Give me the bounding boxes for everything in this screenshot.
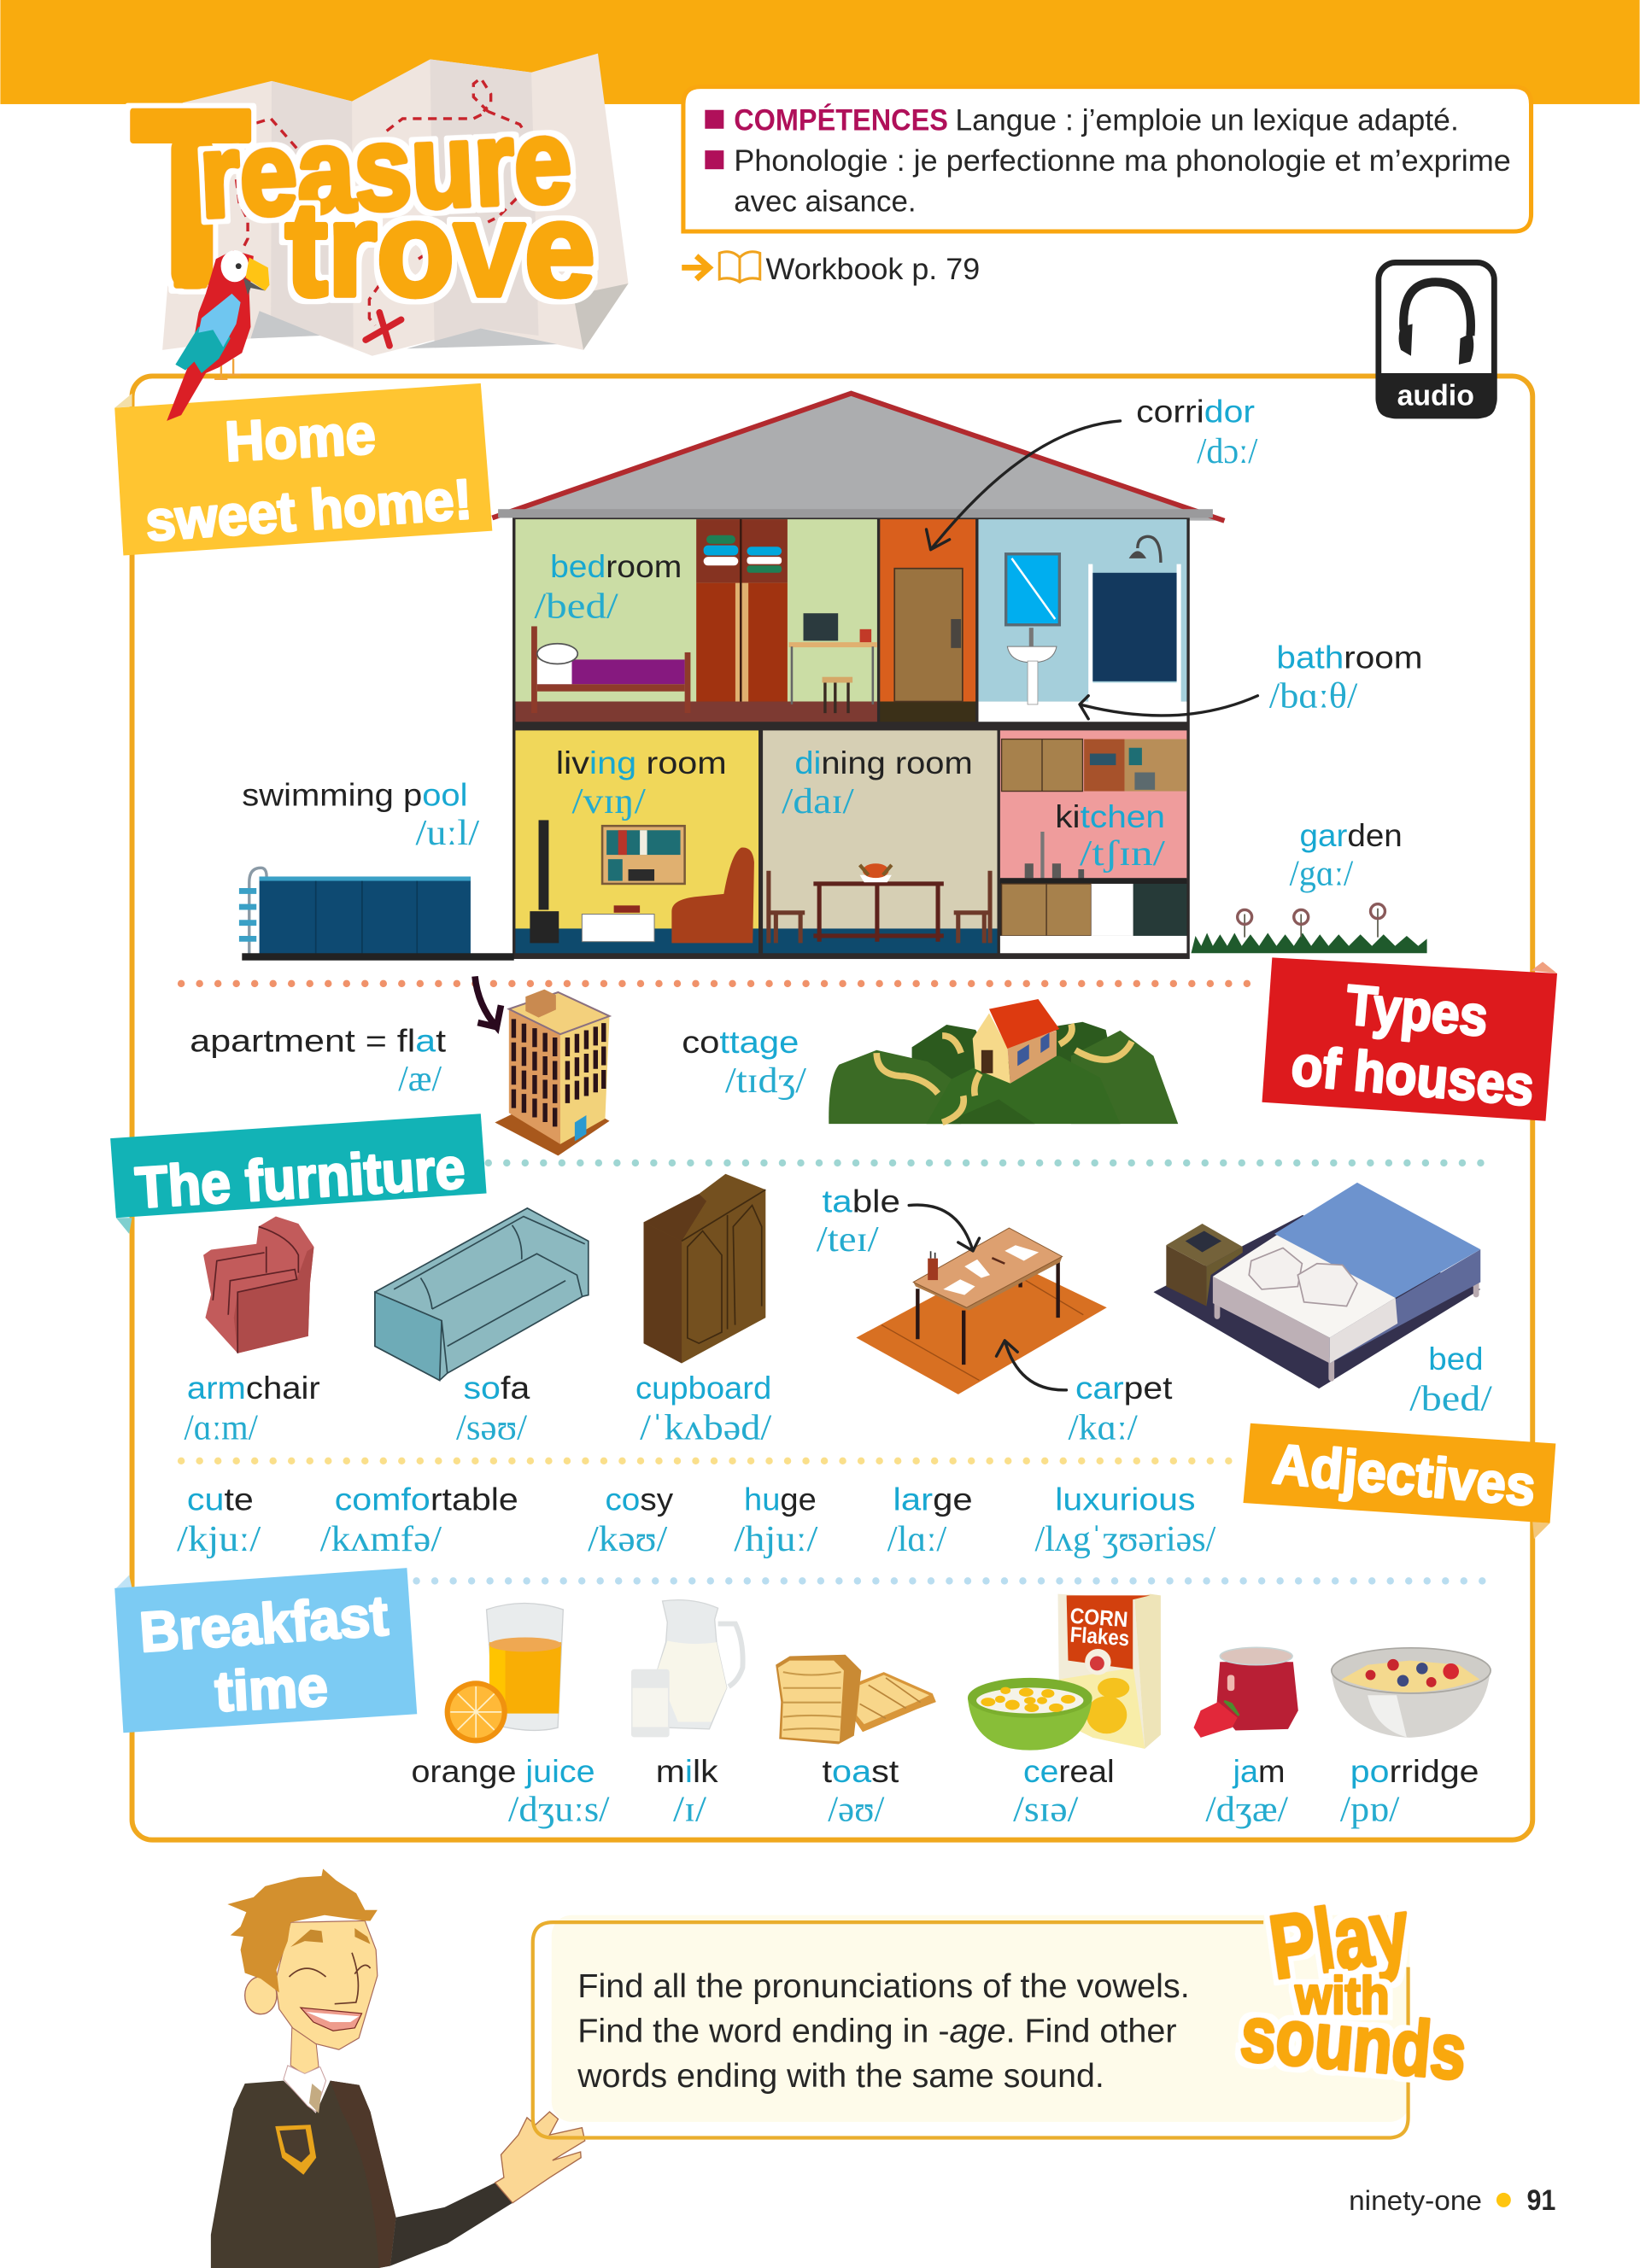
- walls: [512, 517, 1190, 959]
- label: bathroom: [1080, 640, 1423, 719]
- heading: Home sweet home: Home: [224, 402, 377, 473]
- adjective list: huge: [744, 1481, 817, 1517]
- label: porridge: [1340, 1753, 1479, 1830]
- swimming pool: [239, 868, 514, 961]
- icon: bed: [1153, 1183, 1480, 1388]
- label: garden: /gɑː/: [1290, 854, 1353, 894]
- top orange band: [0, 0, 1640, 104]
- mouth: [301, 2008, 362, 2031]
- icon: cottage on hills: [829, 999, 1178, 1124]
- ear: [245, 1977, 277, 2014]
- label: sofa: [456, 1370, 530, 1447]
- adjective list: /kʌmfə/: [320, 1519, 442, 1559]
- icon: apartment building: [495, 990, 610, 1155]
- adjective list: luxurious: [1055, 1481, 1196, 1517]
- adjective list: /lɑː/: [887, 1519, 946, 1559]
- label: sofa: /səʊ/: [456, 1407, 527, 1447]
- title: Treasure trove: T: [131, 58, 250, 339]
- roof: [492, 390, 1224, 521]
- panel: competences: [683, 87, 1532, 231]
- label: cupboard: /ˈkʌbəd/: [640, 1407, 772, 1447]
- label: carpet: [996, 1341, 1173, 1447]
- adjective list: /kjuː/: [177, 1519, 261, 1559]
- heading: Types of houses: of houses: [1289, 1033, 1537, 1118]
- label: milk: milk: [656, 1753, 718, 1789]
- label: armchair: armchair: [187, 1370, 320, 1406]
- eyes and nose: [290, 1953, 371, 2004]
- label: apartment flat: [190, 1022, 447, 1099]
- heading: Adjectives: [1243, 1423, 1555, 1539]
- brows: [290, 1928, 371, 1947]
- label: carpet: carpet: [1075, 1370, 1173, 1406]
- icon: jam jar: [1194, 1647, 1298, 1738]
- sweater: [211, 2081, 396, 2268]
- heading: Play with sounds: Play: [1264, 1880, 1415, 1998]
- panel: play with sounds: words ending with the same sound.: [577, 2058, 1104, 2095]
- adjective list: cosy: [605, 1481, 673, 1517]
- workbook reference: Workbook p. 79: [765, 252, 980, 286]
- page footer: ninety-one: [1349, 2185, 1482, 2216]
- label: swimming pool: [242, 776, 479, 853]
- label: bedroom: [534, 548, 682, 626]
- icon: parrot: [167, 250, 269, 421]
- label: corridor: /dɔː/: [1197, 431, 1258, 471]
- label: table: table: [823, 1183, 900, 1219]
- panel: competences: COMPÉTENCES: [734, 102, 948, 137]
- label: bed: [1409, 1341, 1492, 1419]
- label: garden: [1290, 817, 1403, 894]
- label: bed: bed: [1428, 1341, 1484, 1377]
- adjective list: /kəʊ/: [588, 1519, 668, 1559]
- label: porridge: porridge: [1350, 1753, 1479, 1789]
- label: swimming pool: swimming p ool: [242, 776, 468, 812]
- label: cottage: [682, 1024, 806, 1101]
- label: cupboard: cupboard: [636, 1370, 771, 1406]
- label: sofa: sofa: [463, 1370, 530, 1406]
- label: orange juice: orange juice: [411, 1753, 595, 1789]
- label: orange juice: [411, 1753, 610, 1830]
- label: kitchen: [1055, 798, 1165, 874]
- label: table: [817, 1183, 979, 1260]
- panel: competences: Phonologie : je perfectionne ma phonologie et m’exprime: [734, 143, 1511, 178]
- heading: Play with sounds: with: [1295, 1967, 1390, 2025]
- heading: Breakfast time: [114, 1568, 417, 1733]
- hair: [227, 1868, 378, 1992]
- icon: porridge bowl: [1332, 1648, 1491, 1738]
- label: kitchen: /tʃɪn/: [1080, 833, 1165, 874]
- label: cottage: /tɪdʒ/: [725, 1061, 806, 1101]
- label: toast: toast: [823, 1753, 899, 1789]
- heading: Home sweet home: sweet home!: [144, 467, 474, 552]
- label: bedroom: bedroom: [550, 548, 682, 584]
- page footer: 91: [1526, 2184, 1555, 2217]
- label: garden: garden: [1300, 817, 1403, 853]
- label: dining room: /daɪ/: [782, 781, 854, 821]
- adjective list: comfo rtable: [335, 1481, 518, 1517]
- panel: play with sounds: Find the word ending in - age. Find other: [577, 2014, 1177, 2050]
- dining room room: [763, 730, 998, 953]
- icon: cereal box and bowl: Flakes: [1069, 1623, 1130, 1651]
- label: bathroom: /bɑːθ/: [1269, 675, 1358, 716]
- main panel: [132, 376, 1532, 1840]
- neck: [290, 2025, 319, 2074]
- face: [275, 1920, 378, 2049]
- living room room: [515, 730, 758, 953]
- label: cereal: cereal: [1023, 1753, 1115, 1789]
- label: dining room: [782, 745, 973, 821]
- icon: cereal box and bowl: CORN: [1069, 1605, 1128, 1632]
- label: toast: /əʊ/: [828, 1790, 885, 1830]
- icon: table on carpet: [856, 1228, 1107, 1394]
- hand: [495, 2112, 585, 2203]
- icon: sofa: [375, 1208, 589, 1380]
- label: jam: /dʒæ/: [1205, 1790, 1288, 1830]
- label: cupboard: [636, 1370, 772, 1447]
- arrow: flat: [475, 976, 501, 1027]
- label: cereal: /sɪə/: [1013, 1790, 1079, 1830]
- sweater shade: [331, 2081, 396, 2268]
- icon: toast: [776, 1655, 936, 1744]
- dotted divider: furniture: [489, 1160, 1491, 1165]
- adjective list: /hjuː/: [734, 1519, 818, 1559]
- corridor room: [880, 519, 975, 722]
- heading: The furniture: [110, 1114, 487, 1234]
- label: bedroom: /bed/: [534, 586, 618, 626]
- heading: Types of houses: [1262, 957, 1557, 1121]
- label: armchair: /ɑːm/: [184, 1407, 258, 1447]
- heading: Home sweet home: [114, 383, 492, 555]
- house illustration: [492, 390, 1224, 959]
- label: armchair: [184, 1370, 320, 1447]
- label: porridge: /pɒ/: [1340, 1790, 1400, 1830]
- heading: Adjectives: Adjectives: [1270, 1432, 1538, 1517]
- dotted divider: types of houses: [181, 981, 1265, 985]
- label: cottage: cottage: [682, 1024, 799, 1060]
- label: milk: [656, 1753, 718, 1830]
- bedroom room: [515, 519, 877, 722]
- page footer: [1349, 2184, 1555, 2217]
- label: milk: /ɪ/: [673, 1790, 706, 1830]
- label: table: /teɪ/: [817, 1219, 879, 1260]
- kitchen room: [1000, 730, 1186, 953]
- bathroom room: [978, 519, 1186, 722]
- icon: cereal box and bowl: [968, 1594, 1161, 1751]
- panel: play with sounds: [533, 1915, 1409, 2138]
- icon: cupboard: [644, 1174, 765, 1363]
- label: corridor: [926, 394, 1258, 550]
- heading: The furniture: The furniture: [133, 1137, 466, 1220]
- label: jam: jam: [1233, 1753, 1286, 1789]
- school crest: [275, 2125, 316, 2175]
- label: bathroom: bath room: [1276, 640, 1423, 675]
- label: living room: [556, 745, 727, 821]
- heading: Play with sounds: [1238, 1880, 1470, 2096]
- label: cereal: [1013, 1753, 1115, 1830]
- label: toast: [823, 1753, 899, 1830]
- label: living room: living room: [556, 745, 727, 780]
- icon: audio headphones: [1376, 262, 1496, 418]
- panel: competences: Langue : j’emploie un lexique adapté.: [955, 102, 1459, 137]
- dotted divider: breakfast: [417, 1579, 1491, 1583]
- label: apartment flat: /æ/: [398, 1059, 442, 1099]
- title: Treasure trove: reasure: [196, 94, 574, 243]
- label: kitchen: kitchen: [1055, 798, 1165, 834]
- icon: milk jug: [631, 1600, 743, 1737]
- label: bed: /bed/: [1409, 1379, 1492, 1419]
- sleeve: [390, 2183, 512, 2265]
- adjective list: /lʌgˈʒʊəriəs/: [1035, 1519, 1216, 1559]
- label: jam: [1205, 1753, 1288, 1830]
- title: Treasure trove: trove: [285, 176, 595, 324]
- title: Treasure trove: [131, 58, 595, 339]
- label: apartment flat: apartment = fl at: [190, 1022, 447, 1058]
- treasure map: [162, 54, 629, 356]
- label: swimming pool: /uːl/: [416, 813, 479, 853]
- adjective list: large: [893, 1481, 973, 1517]
- icon: armchair: [203, 1217, 313, 1353]
- panel: play with sounds: Find all the pronunciations of the vowels.: [577, 1968, 1190, 2005]
- label: corridor: corri dor: [1136, 394, 1255, 430]
- icon: audio headphones: audio: [1397, 379, 1474, 412]
- heading: Breakfast time: time: [214, 1654, 330, 1723]
- tie: [309, 2084, 321, 2113]
- heading: Breakfast time: Breakfast: [138, 1583, 390, 1663]
- label: orange juice: /dʒuːs/: [508, 1790, 610, 1830]
- adjective list: [177, 1481, 1216, 1559]
- adjective list: cute: [187, 1481, 254, 1517]
- label: carpet: /kɑː/: [1068, 1407, 1138, 1447]
- label: living room: /vɪŋ/: [572, 781, 646, 821]
- heading: Types of houses: Types: [1344, 973, 1491, 1048]
- dotted divider: adjectives: [181, 1458, 1234, 1463]
- panel: competences: avec aisance.: [734, 184, 917, 218]
- garden: [1191, 904, 1427, 953]
- character: smiling boy: [211, 1868, 585, 2268]
- label: dining room: dining room: [794, 745, 973, 780]
- heading: Play with sounds: sounds: [1238, 1990, 1470, 2096]
- shirt collar: [284, 2066, 326, 2112]
- icon: orange juice: [445, 1603, 563, 1743]
